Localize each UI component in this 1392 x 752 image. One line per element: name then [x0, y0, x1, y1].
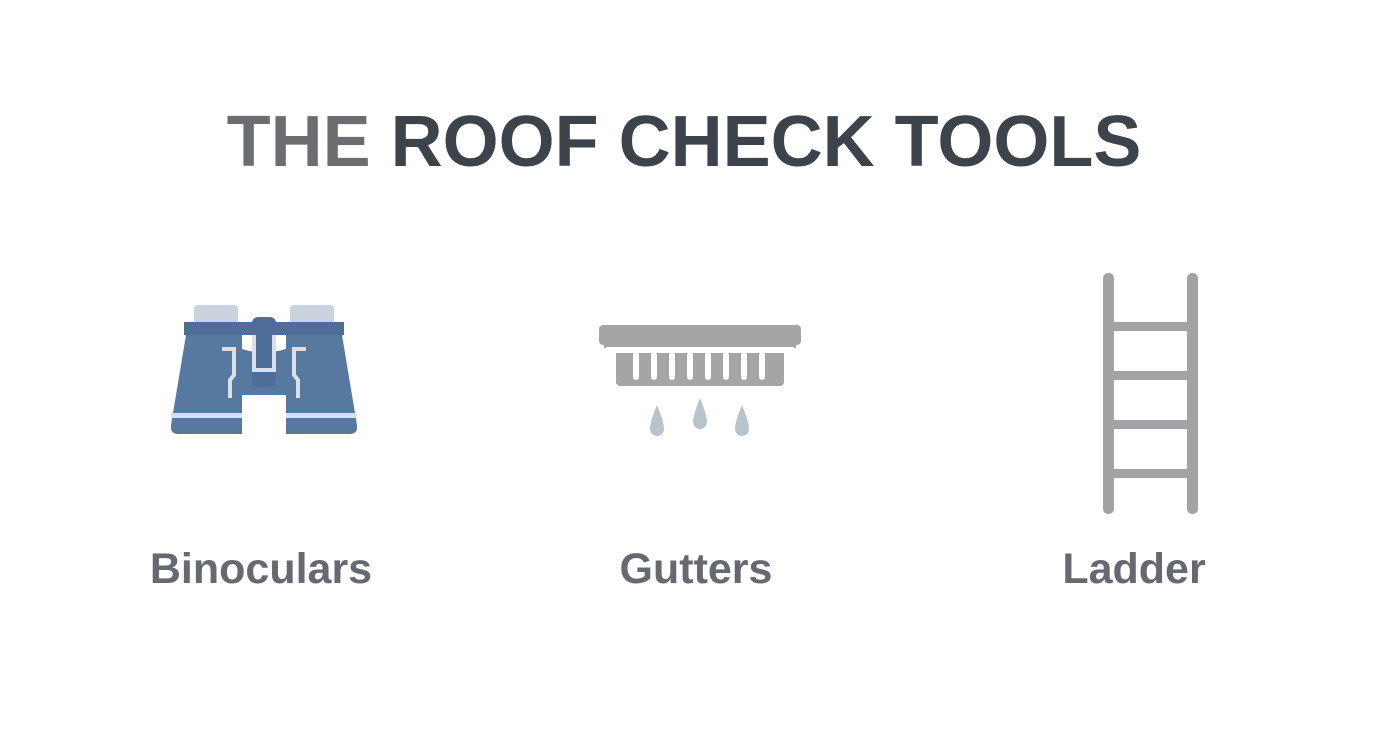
icon: gutters [599, 325, 801, 436]
icon: binoculars [171, 305, 357, 434]
label: ladder: Ladder [1062, 545, 1206, 593]
label: gutters: Gutters [620, 545, 772, 593]
icon: ladder [1103, 273, 1198, 514]
title: THE ROOF CHECK TOOLS [227, 102, 1141, 182]
label: binoculars: Binoculars [150, 545, 372, 593]
